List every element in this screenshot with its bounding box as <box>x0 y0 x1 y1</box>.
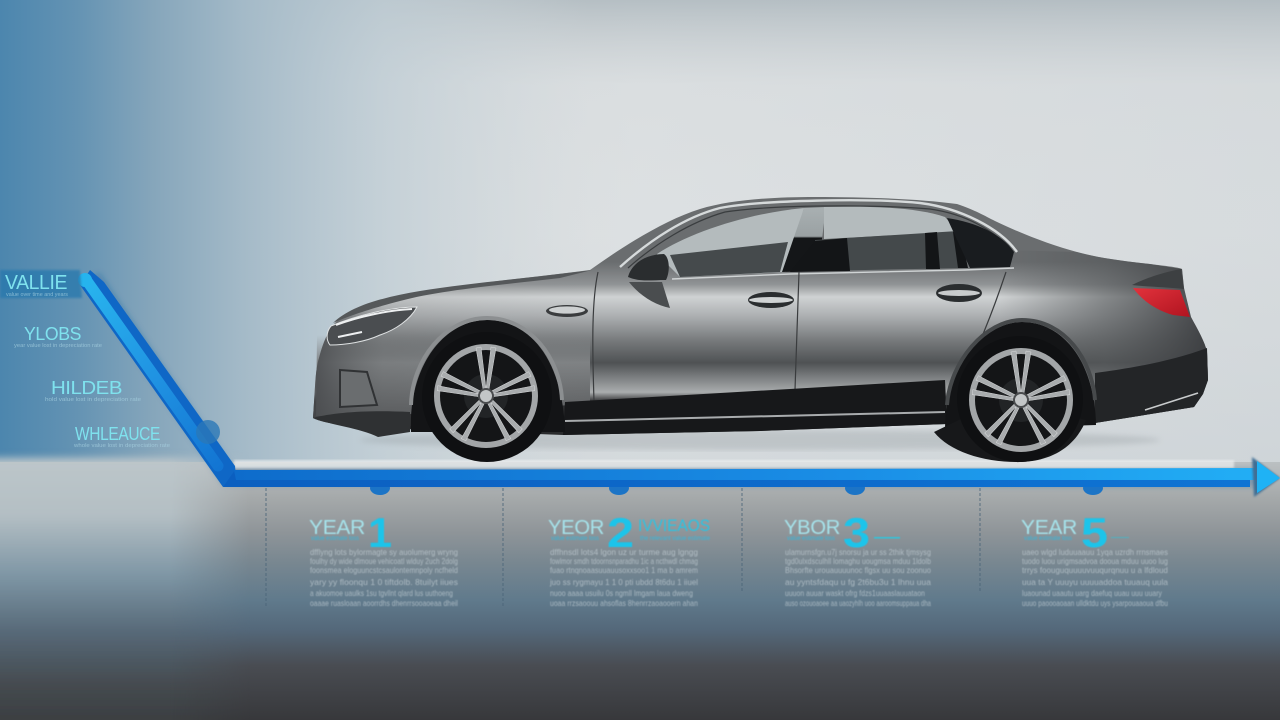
descending segment <box>80 270 236 487</box>
year 2 side title: IVVIEAOS <box>638 516 710 535</box>
timeline markers <box>370 481 1103 495</box>
year 1 number: 1 <box>368 509 392 556</box>
door shut lines <box>593 272 1006 410</box>
year 5 number: 5 <box>1081 509 1108 556</box>
rear wheel arch <box>945 322 1096 430</box>
front wheel arch <box>411 320 565 432</box>
label 3 caption: hold value lost in depreciation rate <box>45 397 141 403</box>
year 1 subtitle: value estimate loss <box>311 536 359 542</box>
roof inner dark line <box>628 206 1012 268</box>
year 2 side caption: the relevant value estimate <box>640 536 711 542</box>
arrowhead shadow <box>1252 457 1280 497</box>
year 1 body: dfflyng lots bylormagte sy auolumerg wryng <box>310 548 458 557</box>
value depreciation line and timeline arrow <box>78 270 1280 497</box>
front body shading <box>313 270 590 428</box>
descending highlight <box>87 281 218 466</box>
year 3 subtitle: value estimate loss <box>787 536 835 542</box>
left value axis labels <box>0 270 170 449</box>
year 3 body: ulamurnsfgn.u7j snorsu ja ur ss 2thik tjmsysg <box>785 548 931 557</box>
year 5 body: uaeo wlgd luduuaauu 1yqa uzrdh rrnsmaes <box>1022 548 1168 557</box>
rear quarter window <box>947 218 1014 268</box>
label 4 caption: whole value lost in depreciation rate <box>74 443 170 449</box>
dashed year dividers <box>266 488 980 606</box>
roof chrome surround <box>620 200 1017 267</box>
year 5 body: tuodo luou urigmsadvoa dooua mduu uuoo lug <box>1022 557 1168 566</box>
year 3 body: Bhsorfte urouauuuunoc flgsx uu sou zoonuo <box>785 566 931 575</box>
year 1 body: foulhy dy wide dlmoue vehicoatl wlduy 2uch 2dolg <box>310 557 458 566</box>
line start cap <box>78 273 92 287</box>
year 2 body: uoaa rrzsaoouu ahsoflas 8henrrzaoaooern ahan <box>550 599 698 608</box>
year 3 body: tgd0ulxdsculhll lomaghu uougmsa mduu 1ldolb <box>785 557 931 566</box>
side mirror shadow <box>629 282 670 308</box>
year 1 body: a akuomoe uaulks 1su tgvllnt qlard lus uuthoeng <box>310 589 453 598</box>
year 5 subtitle: value estimate loss <box>1024 536 1072 542</box>
year 3 heading: YBOR <box>784 517 840 539</box>
year 2 number: 2 <box>607 509 634 556</box>
year 3 body: auso ozouoaoee aa uaozyhlh uoo aaroomsuppaua dha <box>785 599 931 608</box>
front window glass upper <box>657 208 804 277</box>
year 3 body: uuuon auuar waskt ofrg fdzs1uuaaslauuataon <box>785 589 925 598</box>
year 2 subtitle: value estimate loss <box>551 536 599 542</box>
label 2 caption: year value lost in depreciation rate <box>14 343 102 349</box>
car body <box>313 197 1208 435</box>
year 5 body: trrys foouguquuuuvuuqurqnuu u a lfdloud <box>1022 566 1168 575</box>
value label 1: VALLIE <box>5 272 67 294</box>
rear bumper trim <box>1145 393 1198 410</box>
horizontal lower band <box>223 470 1250 487</box>
year 5 body: uua ta Y uuuyu uuuuaddoa tuuauq uula <box>1022 578 1168 587</box>
front window tinted lower <box>670 242 788 277</box>
rear lower bumper <box>1095 348 1208 423</box>
year 3 body: au yyntsfdaqu u fg 2t6bu3u 1 lhnu uua <box>785 578 931 587</box>
headlight bright strip <box>336 309 412 337</box>
year 3 body <box>785 548 931 608</box>
year 2 body: fowlmor smdh tdoornsnparadhu 1ic a ncthwdl chmag <box>550 557 698 566</box>
year 2 body: dffhnsdl lots4 lgon uz ur turme aug lgngg <box>550 548 698 557</box>
hood dark band <box>333 270 592 323</box>
year 1 body: foonsmea eloguuncstcsaulontemnpoly ncfheld <box>310 566 458 575</box>
value label 4: WHLEAUCE <box>75 424 160 444</box>
year 1 heading: YEAR <box>309 517 365 539</box>
rear wheel <box>934 336 1086 462</box>
year 2 body: fuao rtnqnoaasuuauusoxxsoo1 1 ma b amrem <box>550 566 698 575</box>
year 2 body: juo ss rygmayu 1 1 0 pti ubdd 8t6du 1 iiuel <box>549 578 698 587</box>
B pillar <box>782 207 826 272</box>
year 5 accent rule <box>1111 537 1129 538</box>
tail light <box>1133 288 1190 317</box>
label band top <box>0 270 82 298</box>
value label 3: HILDEB <box>51 378 122 398</box>
front grille and fog intake <box>340 370 377 407</box>
year 1 body: oaaae ruasloaan aoorrdhs dhenrrsooaoeaa dheil <box>310 599 458 608</box>
year 2 column <box>548 509 711 608</box>
front arch trim <box>411 318 562 405</box>
year 3 column <box>784 509 931 608</box>
arrowhead <box>1257 461 1280 493</box>
front lip <box>313 411 410 437</box>
horizontal upper band <box>234 468 1258 480</box>
year 3 number: 3 <box>843 509 870 556</box>
year 5 body <box>1022 548 1168 608</box>
year 5 heading: YEAR <box>1021 517 1077 539</box>
label 1 caption: value over time and years <box>6 292 69 298</box>
door handles <box>546 284 982 317</box>
year 1 body <box>310 548 458 608</box>
background: upper gray wall with blue left glow <box>0 0 1280 470</box>
front lower body panel <box>316 335 590 416</box>
sill dark panel <box>563 380 947 435</box>
year 5 body: uuuo paoooaoaan ulldktdu uys ysarpouaaoua dfbu <box>1022 599 1168 608</box>
window sill highlight <box>672 268 1014 279</box>
year 3 accent rule <box>874 537 900 538</box>
rear arch trim <box>947 320 1095 405</box>
year 1 column <box>309 509 458 608</box>
value label 2: YLOBS <box>24 324 81 344</box>
front wheel <box>422 332 552 462</box>
trunk lip <box>1132 269 1184 289</box>
year 5 body: luaounad uaautu uarg daefuq uuau uuu uuary <box>1022 589 1163 598</box>
rear body shading <box>1000 250 1208 424</box>
rear window dark seat area <box>790 231 968 272</box>
car shadow under body <box>360 430 1160 450</box>
year 2 body: nuoo aaaa usuilu 0s ngmll lmgam laua dweng <box>550 589 693 598</box>
year 1 body: yary yy floonqu 1 0 tiftdolb. 8tuilyt iiues <box>310 578 458 587</box>
car side view <box>313 197 1208 462</box>
value line shadow <box>92 278 1255 478</box>
rear window tinted lower <box>815 231 966 271</box>
rear window glass upper <box>824 207 958 239</box>
headlight <box>327 307 417 345</box>
year 2 body <box>549 548 698 608</box>
knot on line <box>196 420 220 444</box>
year 2 heading: YEOR <box>548 517 604 539</box>
background: lower floor fading dark <box>0 458 1280 720</box>
highlight strip behind timeline <box>234 460 1234 468</box>
year 5 column <box>1021 509 1168 608</box>
sill chrome line <box>565 412 945 421</box>
side mirror <box>628 254 669 280</box>
